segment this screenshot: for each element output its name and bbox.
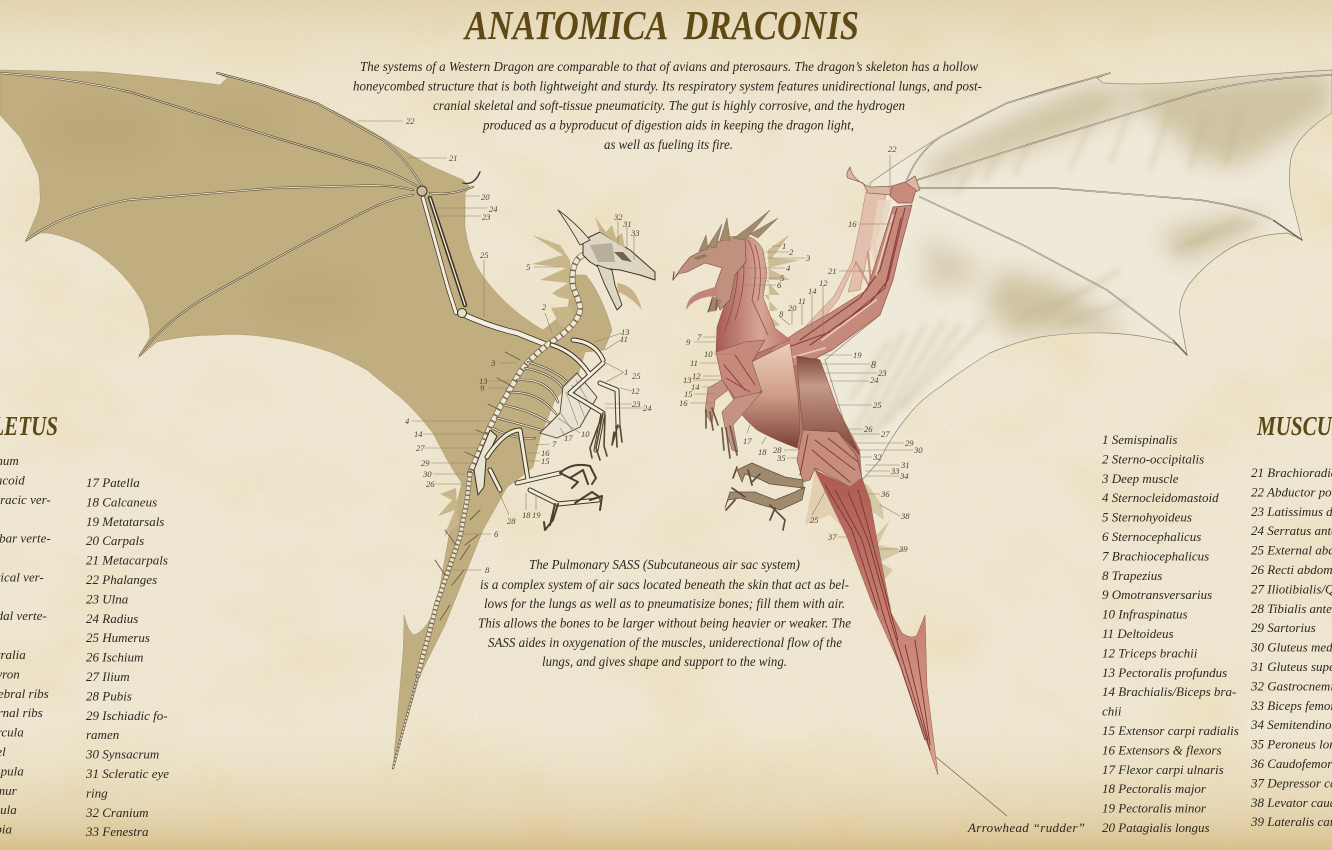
skeleton callout numbers: 23 xyxy=(632,399,641,409)
skeleton callout numbers: 24 xyxy=(489,204,498,214)
muscle legend column 1: 18 Pectoralis major xyxy=(1102,781,1207,796)
wing stains xyxy=(40,102,360,322)
skeleton legend column 2: 27 Ilium xyxy=(86,669,130,684)
skeleton legend column 2: 28 Pubis xyxy=(86,688,132,703)
skeleton callout numbers: 17 xyxy=(564,433,573,443)
skeleton callout numbers: 25 xyxy=(480,250,489,260)
muscle callout numbers: 21 xyxy=(828,266,837,276)
muscle legend column 1: 11 Deltoideus xyxy=(1102,626,1174,641)
skeleton callout numbers: 32 xyxy=(613,212,623,222)
body base xyxy=(716,327,862,478)
skeleton legend column 2: 25 Humerus xyxy=(86,630,150,645)
muscle legend column 1: 8 Trapezius xyxy=(1102,568,1162,583)
feet and claws xyxy=(544,465,602,530)
muscle legend column 1: 10 Infraspinatus xyxy=(1102,607,1188,622)
muscle callout numbers: 8 xyxy=(871,360,876,371)
skeleton wing bones xyxy=(0,73,547,355)
muscle legend column 1: 2 Sterno-occipitalis xyxy=(1102,451,1204,466)
neck mane spikes xyxy=(764,234,800,328)
muscle callout numbers: 30 xyxy=(913,445,923,455)
skull xyxy=(583,232,655,280)
skeleton callout numbers: 15 xyxy=(541,456,550,466)
muscle callout numbers: 31 xyxy=(900,460,910,470)
skeleton callout numbers: 18 xyxy=(522,510,531,520)
skeleton callout numbers: 13 xyxy=(621,327,630,337)
SASS text block: is a complex system of air sacs located beneath the skin that act as bel- xyxy=(480,577,849,592)
muscle callout numbers: 1 xyxy=(782,241,786,251)
skeleton callout numbers: 24 xyxy=(643,403,652,413)
muscle dragon xyxy=(673,167,938,775)
skeleton callout numbers: 8 xyxy=(485,565,490,575)
muscle legend column 1: 13 Pectoralis profundus xyxy=(1102,665,1227,680)
intro text block: honeycombed structure that is both lightweight and sturdy. Its respiratory system features unidirectional lungs, and post- xyxy=(353,78,982,94)
head xyxy=(673,236,746,310)
skeleton callout numbers: 16 xyxy=(541,448,550,458)
skeleton legend column 2: 22 Phalanges xyxy=(86,572,157,587)
intro text block: as well as fueling its fire. xyxy=(604,137,733,152)
skeleton legend column 2: 21 Metacarpals xyxy=(86,553,168,568)
muscle callout numbers: 25 xyxy=(873,400,882,410)
tail xyxy=(815,470,938,775)
muscle legend column 2: 29 Sartorius xyxy=(1251,620,1316,635)
muscle callout numbers: 14 xyxy=(691,382,700,392)
skeleton legend column 2: 19 Metatarsals xyxy=(86,514,164,529)
skeleton callout numbers: 6 xyxy=(494,529,499,539)
feet xyxy=(725,463,805,510)
chest and shoulder xyxy=(716,340,765,398)
muscle legend column 1: 7 Brachiocephalicus xyxy=(1102,548,1209,563)
muscle callout numbers: 9 xyxy=(686,337,691,347)
muscle callout numbers: 11 xyxy=(798,296,806,306)
tail spikes xyxy=(855,480,905,610)
skeleton legend column 2: 24 Radius xyxy=(86,611,138,626)
SASS text block: lows for the lungs as well as to pneumatisize bones; fill them with air. xyxy=(484,596,845,611)
muscle callout numbers: 7 xyxy=(697,332,702,342)
muscle callout numbers: 33 xyxy=(890,466,900,476)
muscle callout numbers: 38 xyxy=(900,511,910,521)
spines: neck and back xyxy=(438,235,574,536)
skeleton callout numbers: 25 xyxy=(632,371,641,381)
skeleton callout numbers: 20 xyxy=(481,192,490,202)
skeleton callout numbers: 22 xyxy=(406,116,415,126)
skeleton callout numbers: 11 xyxy=(620,334,628,344)
muscle callout numbers: 37 xyxy=(827,532,837,542)
neck xyxy=(716,236,790,362)
skeleton legend column 2: 23 Ulna xyxy=(86,591,129,606)
muscle callout numbers: 17 xyxy=(743,436,752,446)
skeleton legend column 2: 17 Patella xyxy=(86,475,140,490)
muscle legend column 1: 16 Extensors & flexors xyxy=(1102,742,1222,757)
intro text block: cranial skeletal and soft-tissue pneumaticity. The gut is highly corrosive, and the hydrogen xyxy=(433,98,905,113)
skeleton legend column 2: 18 Calcaneus xyxy=(86,494,157,509)
muscle callout numbers: 26 xyxy=(864,424,873,434)
skeleton callout numbers: 14 xyxy=(414,429,423,439)
skeleton callout numbers: 3 xyxy=(490,358,495,368)
muscle legend column 1: chii xyxy=(1102,704,1122,719)
forelegs xyxy=(705,380,762,452)
muscle callout numbers: 8 xyxy=(779,309,784,319)
muscle legend column 1: 1 Semispinalis xyxy=(1102,432,1177,447)
forearm xyxy=(770,205,912,372)
skeleton callout numbers: 12 xyxy=(631,386,640,396)
muscle legend column 1: 17 Flexor carpi ulnaris xyxy=(1102,762,1224,777)
intro text block xyxy=(353,59,982,152)
muscle callout numbers: 19 xyxy=(853,350,862,360)
muscle callout numbers: 16 xyxy=(679,398,688,408)
skeleton callout numbers: 27 xyxy=(416,443,425,453)
muscle legend column 1: 3 Deep muscle xyxy=(1101,471,1179,486)
skeleton callout numbers: 13 xyxy=(479,376,488,386)
muscle callout numbers: 36 xyxy=(880,489,890,499)
rudder callout: Arrowhead “rudder” xyxy=(967,820,1085,835)
muscle callout numbers: 32 xyxy=(872,452,882,462)
title: ANATOMICA DRACONIS xyxy=(462,2,859,48)
SASS text block: lungs, and gives shape and support to the wing. xyxy=(542,654,787,669)
muscle legend column 1: 20 Patagialis longus xyxy=(1102,820,1210,835)
SASS text block: The Pulmonary SASS (Subcutaneous air sac system) xyxy=(529,557,800,572)
muscle callout numbers: 14 xyxy=(808,286,817,296)
skeleton callout numbers xyxy=(357,116,652,575)
muscle callout numbers: 35 xyxy=(776,453,786,463)
SASS text block xyxy=(478,557,851,669)
sternum xyxy=(540,373,597,438)
muscle callout numbers: 27 xyxy=(881,429,890,439)
muscle wing fingers xyxy=(905,73,1332,355)
skeleton legend column 2: 30 Synsacrum xyxy=(85,747,159,762)
muscle callout numbers: 28 xyxy=(773,445,782,455)
muscle callout numbers: 23 xyxy=(878,368,887,378)
muscle legend column 1: 5 Sternohyoideus xyxy=(1102,510,1192,525)
muscle callout numbers: 18 xyxy=(758,447,767,457)
muscle wing shading xyxy=(845,72,1332,450)
skeleton callout numbers: 21 xyxy=(449,153,458,163)
skeleton legend column 2: 29 Ischiadic fo- xyxy=(86,708,168,723)
back spikes xyxy=(435,352,520,620)
muscle callout numbers: 24 xyxy=(870,375,879,385)
pectoral xyxy=(737,343,800,448)
intro text block: produced as a byproducut of digestion aids in keeping the dragon light, xyxy=(482,118,854,132)
SASS text block: SASS aides in oxygenation of the muscles, uniderectional flow of the xyxy=(488,635,842,650)
muscle callout numbers: 12 xyxy=(819,278,828,288)
skeleton callout numbers: 4 xyxy=(405,416,410,426)
muscle legend column 1: 12 Triceps brachii xyxy=(1102,645,1198,660)
skeleton legend column 2: 26 Ischium xyxy=(86,650,143,665)
skeleton callout numbers: 26 xyxy=(426,479,435,489)
skeleton legend column 2: 31 Scleratic eye xyxy=(85,766,169,781)
muscle callout numbers: 13 xyxy=(683,375,692,385)
muscle callout numbers: 16 xyxy=(848,219,857,229)
muscle callout numbers: 20 xyxy=(788,303,797,313)
tail membrane low xyxy=(805,470,855,540)
muscle legend column 1: 6 Sternocephalicus xyxy=(1102,529,1201,544)
muscle callout numbers: 25 xyxy=(810,515,819,525)
muscle legend column 1: 15 Extensor carpi radialis xyxy=(1102,723,1239,738)
muscle wing membrane xyxy=(825,70,1332,480)
hind legs xyxy=(487,430,598,504)
pelvis xyxy=(474,430,497,495)
tail vertebrae xyxy=(418,473,470,675)
rudder callout xyxy=(936,757,1085,835)
muscle callout numbers: 15 xyxy=(684,389,693,399)
skeleton legend column 2: 33 Fenestra xyxy=(85,824,149,839)
skeleton callout numbers: 9 xyxy=(480,383,485,393)
muscle callout numbers: 22 xyxy=(888,144,897,154)
skeleton callout numbers: 28 xyxy=(507,516,516,526)
hind leg thigh and shin xyxy=(797,430,862,487)
muscle legend column 1: 4 Sternocleidomastoid xyxy=(1102,490,1219,505)
skeleton callout numbers: 33 xyxy=(630,228,640,238)
muscle callout numbers: 39 xyxy=(898,544,908,554)
muscle callout numbers: 11 xyxy=(690,358,698,368)
hands xyxy=(590,413,622,460)
skeleton callout numbers: 2 xyxy=(542,302,547,312)
skeleton legend column 2: 32 Cranium xyxy=(85,805,148,820)
muscle callout numbers: 29 xyxy=(905,438,914,448)
muscle callout numbers: 5 xyxy=(780,273,785,283)
skeleton callout numbers: 10 xyxy=(581,429,590,439)
skeleton legend column 2: ring xyxy=(86,785,108,800)
muscle callout numbers: 34 xyxy=(899,471,909,481)
skeleton callout numbers: 23 xyxy=(482,212,491,222)
muscle legend column 1: 14 Brachialis/Biceps bra- xyxy=(1102,684,1236,699)
muscle callout numbers xyxy=(679,144,923,554)
skeleton callout numbers: 31 xyxy=(622,219,632,229)
muscle callout numbers: 12 xyxy=(692,371,701,381)
skeleton callout numbers: 19 xyxy=(532,510,541,520)
skeleton callout numbers: 1 xyxy=(624,367,628,377)
muscle callout numbers: 4 xyxy=(786,263,791,273)
muscle callout numbers: 10 xyxy=(704,349,713,359)
skeleton callout numbers: 30 xyxy=(422,469,432,479)
skeleton legend column 2: ramen xyxy=(86,727,119,742)
ribs xyxy=(492,362,572,438)
skeleton legend column 2: 20 Carpals xyxy=(86,533,144,548)
intro text block: The systems of a Western Dragon are comparable to that of avians and pterosaurs. The dragon’s skeleton has a hollow xyxy=(360,59,978,74)
SASS text block: This allows the bones to be larger without being heavier or weaker. The xyxy=(478,616,851,630)
muscle legend column 1: 19 Pectoralis minor xyxy=(1102,801,1207,816)
patagium web xyxy=(800,192,892,340)
muscle callout numbers: 2 xyxy=(789,247,794,257)
skeleton callout numbers: 7 xyxy=(552,439,557,449)
skeleton wing and body membrane xyxy=(0,70,612,768)
skeleton callout numbers: 5 xyxy=(526,262,531,272)
wrist and claw xyxy=(847,167,920,196)
muscle callout numbers: 3 xyxy=(805,253,810,263)
muscle callout numbers: 6 xyxy=(777,280,782,290)
muscle legend column 1: 9 Omotransversarius xyxy=(1102,587,1212,602)
spine and neck xyxy=(470,255,583,473)
forelimbs xyxy=(552,340,618,450)
horns and crest xyxy=(699,210,778,251)
skeleton callout numbers: 29 xyxy=(421,458,430,468)
tongue and lower jaw xyxy=(686,286,718,310)
skeleton dragon xyxy=(393,210,655,768)
abdominal muscles xyxy=(797,356,860,455)
